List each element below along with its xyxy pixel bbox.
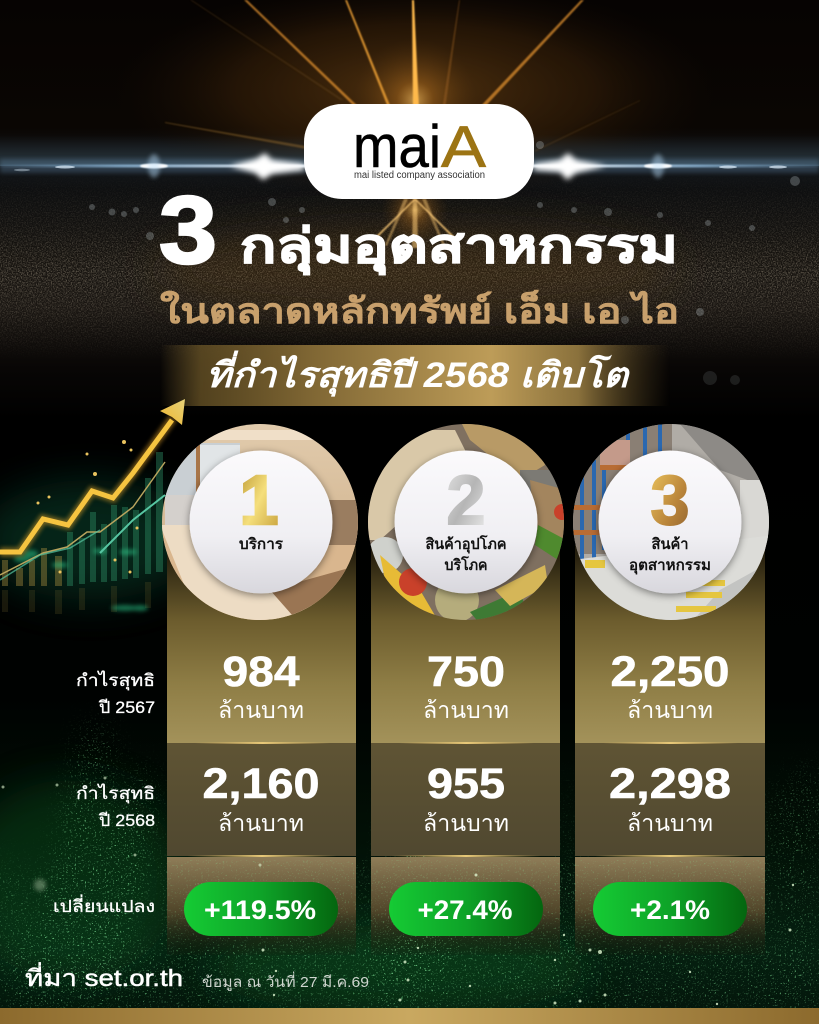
logo pill: A <box>441 115 486 180</box>
chart reflections <box>2 582 151 614</box>
values: services: ล้านบาท <box>218 810 304 836</box>
numeral 1: 1 <box>240 461 278 539</box>
row label: net profit 2567: กำไรสุทธิ <box>76 670 155 691</box>
golden light rays <box>165 0 640 248</box>
row label: net profit 2567: ปี 2567 <box>98 698 155 717</box>
category label <box>426 534 506 574</box>
source: ที่มา set.or.th <box>25 962 183 991</box>
change pill: services: +119.5% <box>204 895 316 925</box>
sparkles <box>2 776 794 1015</box>
logo wordmark: mai <box>353 113 441 180</box>
values: industrial products: ล้านบาท <box>627 697 713 723</box>
category 3: industrial products <box>570 420 775 624</box>
band heading: ที่กำไรสุทธิปี 2568 เติบโต <box>206 350 630 397</box>
values: services <box>202 648 320 836</box>
category label <box>629 535 711 575</box>
change pill: consumer products <box>389 882 543 936</box>
photo: living room <box>160 420 360 624</box>
logo pill: mai listed company association <box>354 170 485 181</box>
lens flare <box>0 153 819 180</box>
values: consumer products: ล้านบาท <box>423 697 509 723</box>
change pill: consumer products: +27.4% <box>418 895 512 925</box>
subtitle: ในตลาดหลักทรัพย์ เอ็ม เอ ไอ <box>160 289 679 331</box>
values: consumer products: 955 <box>427 760 505 808</box>
row label: net profit 2568 <box>76 783 155 830</box>
values: services: 2,160 <box>202 760 320 808</box>
values: services: ล้านบาท <box>218 697 304 723</box>
values: industrial products: ล้านบาท <box>627 810 713 836</box>
photo: food <box>366 420 570 624</box>
values: services: 984 <box>222 648 300 696</box>
green particles over lower columns <box>160 860 770 960</box>
data date note: ข้อมูล ณ วันที่ 27 มี.ค.69 <box>202 971 369 991</box>
gold arrow head <box>160 399 185 425</box>
number disc <box>598 450 742 594</box>
chart sparkles <box>36 440 138 574</box>
category label: สินค้า <box>652 535 688 553</box>
gold trend line glow <box>0 418 173 552</box>
gold trend line <box>0 420 172 552</box>
gold title band <box>160 345 670 406</box>
numeral 2: 2 <box>447 461 485 539</box>
photo: warehouse <box>570 420 775 624</box>
chart bars <box>2 452 163 586</box>
values: consumer products: ล้านบาท <box>423 810 509 836</box>
category label: สินค้าอุปโภค <box>426 534 506 554</box>
title: 3: 3 <box>159 177 217 284</box>
growth chart illustration <box>0 399 200 614</box>
thin trend lines <box>0 462 165 575</box>
row label: change: เปลี่ยนแปลง <box>53 894 155 916</box>
values: consumer products: 750 <box>427 648 505 696</box>
category label: บริโภค <box>444 555 488 574</box>
column 1 <box>167 545 356 955</box>
number disc <box>394 450 538 594</box>
change pill: services <box>184 882 338 936</box>
row label: net profit 2568: กำไรสุทธิ <box>76 783 155 804</box>
row label: net profit 2568: ปี 2568 <box>98 811 155 830</box>
values: industrial products: 2,250 <box>610 648 730 696</box>
values: industrial products <box>609 648 731 836</box>
change pill: industrial products <box>593 882 747 936</box>
category label: อุตสาหกรรม <box>629 557 711 575</box>
chart glow spots <box>14 548 148 611</box>
values: consumer products <box>423 648 509 836</box>
change pill: industrial products: +2.1% <box>630 895 710 925</box>
title: industry groups: กลุ่มอุตสาหกรรม <box>240 219 678 275</box>
numeral 3: 3 <box>651 461 689 539</box>
number disc <box>190 450 332 594</box>
category 1: services <box>160 420 360 624</box>
column 3 <box>575 545 765 955</box>
column 2 <box>371 545 560 955</box>
bottom gold strip <box>0 1008 819 1024</box>
category label: บริการ <box>239 535 284 553</box>
row label: net profit 2567 <box>76 670 155 717</box>
bokeh highlights <box>89 141 800 385</box>
category 2: consumer products <box>366 420 570 624</box>
values: industrial products: 2,298 <box>609 760 731 808</box>
logo pill <box>304 104 534 199</box>
